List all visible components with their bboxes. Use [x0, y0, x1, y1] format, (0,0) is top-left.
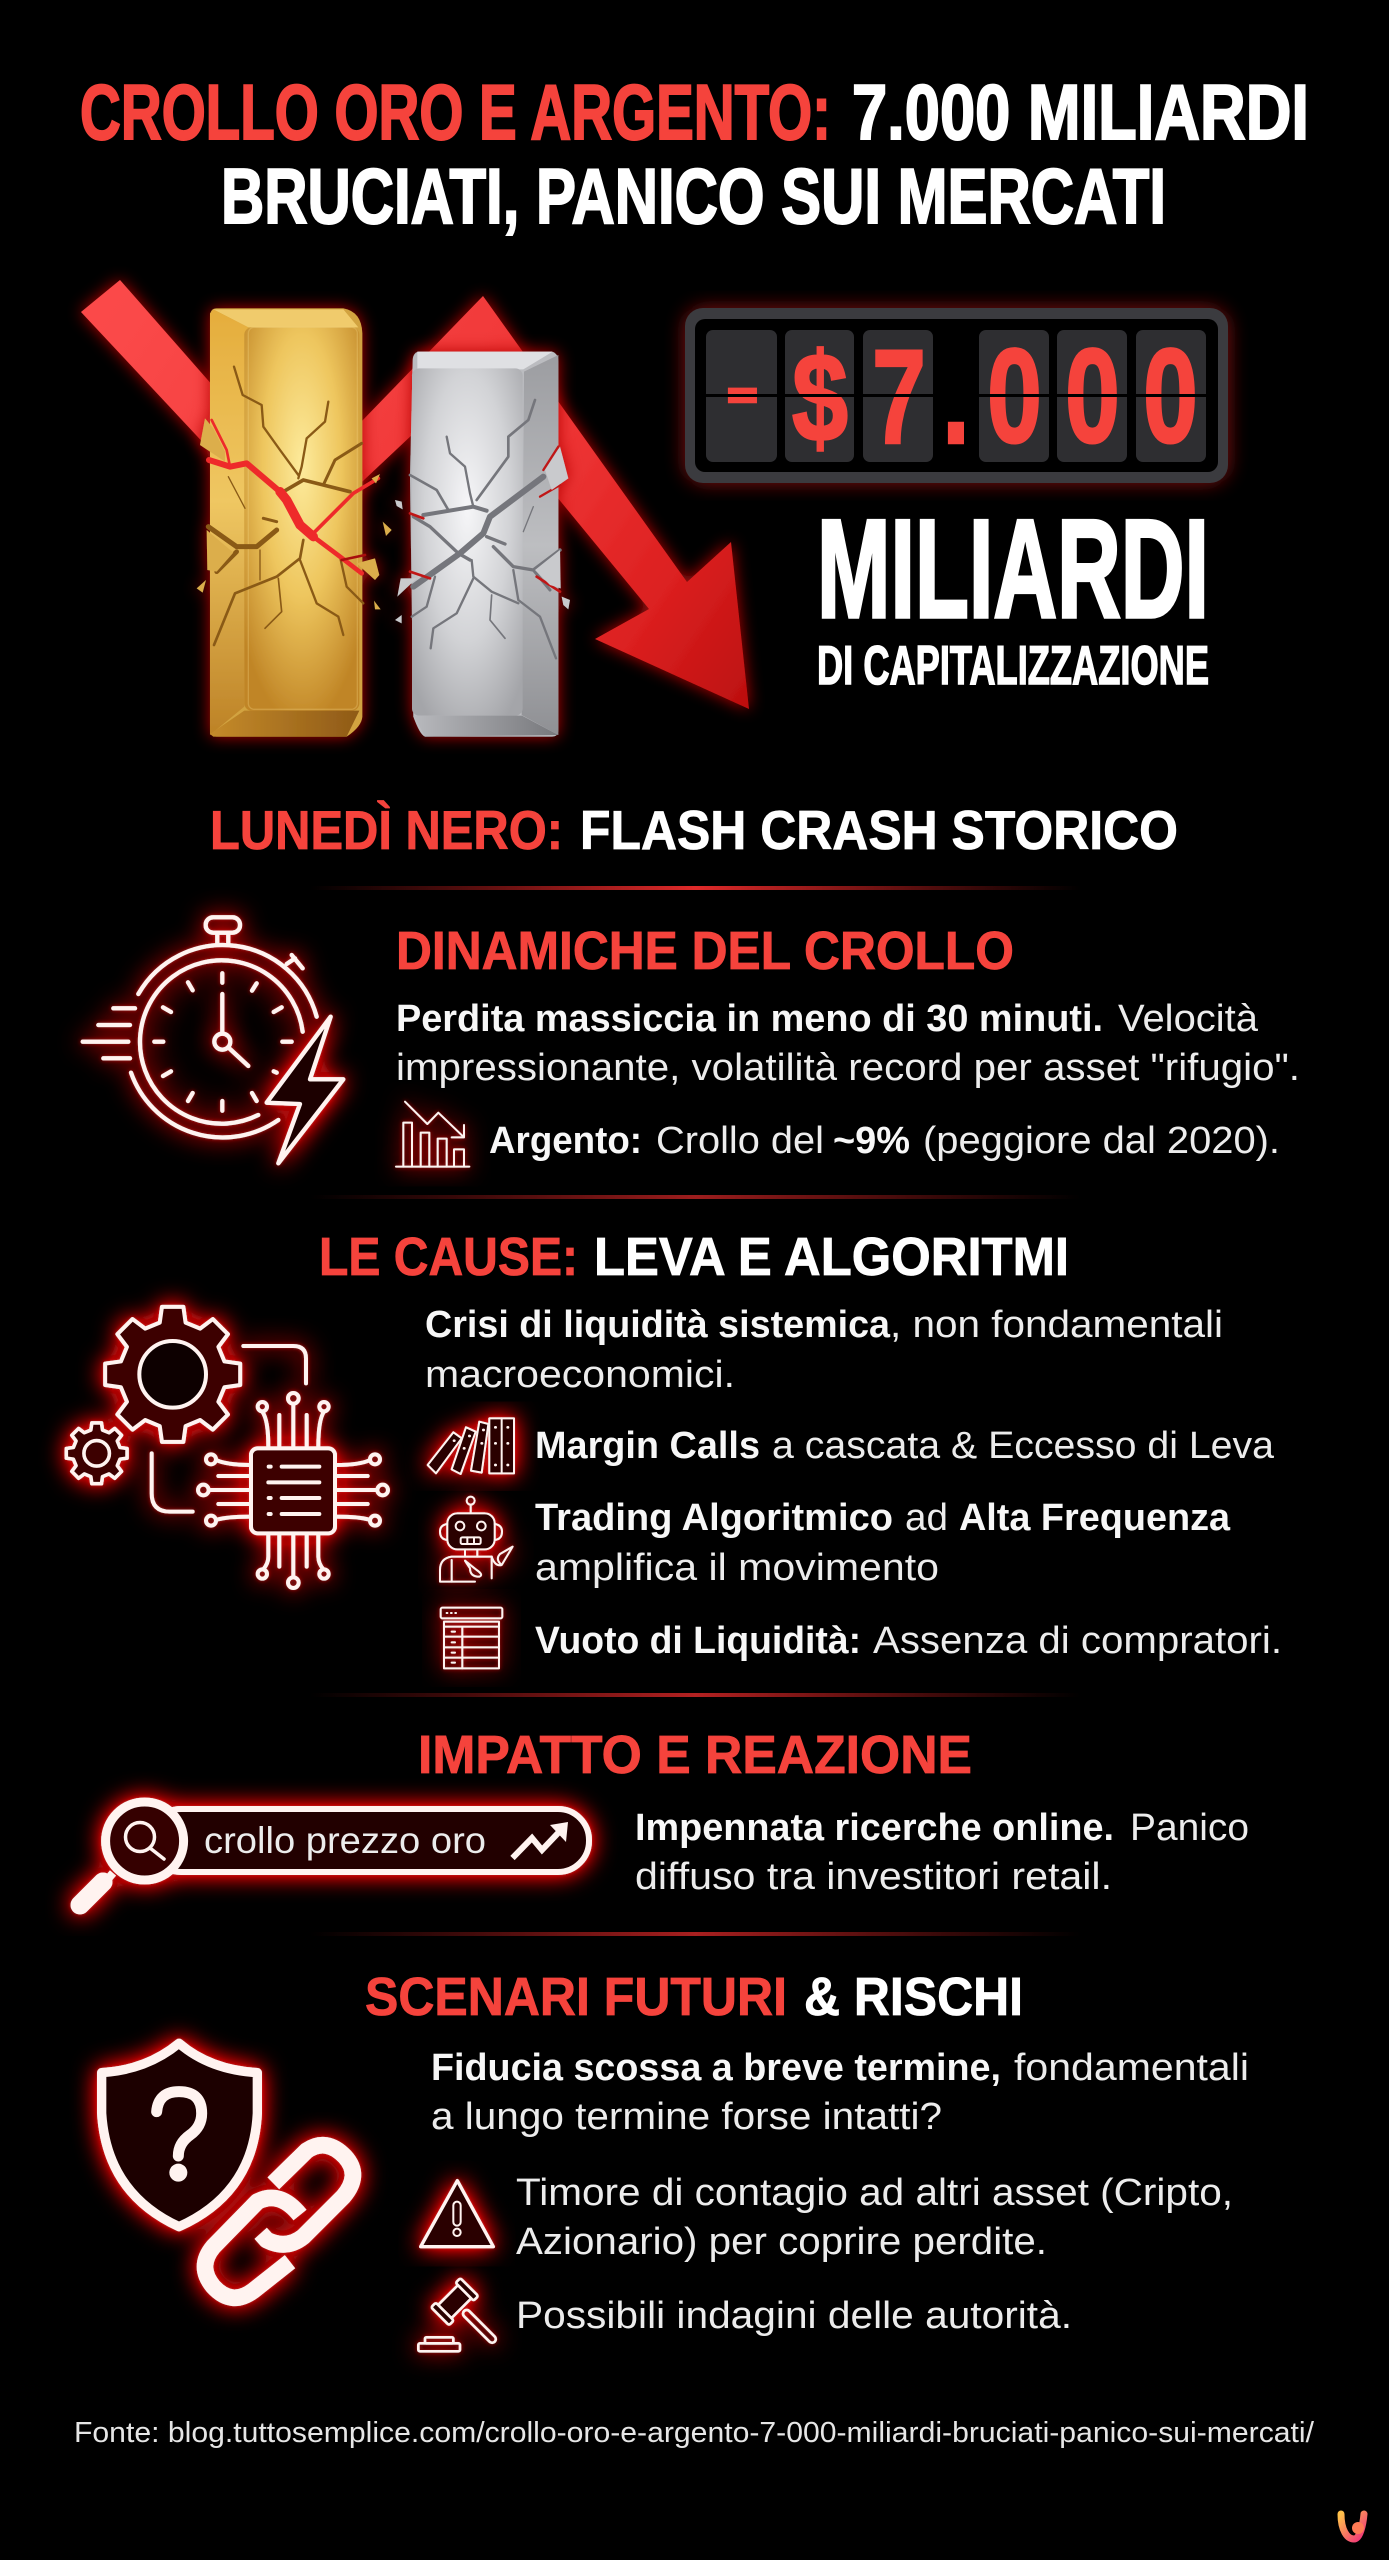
text: argento: (peggiore dal 2020). [923, 1120, 1280, 1162]
text: argento: Crollo del [656, 1120, 824, 1162]
icon: falling bar chart [396, 1102, 469, 1167]
heading: lunedi nero [210, 799, 1178, 861]
text: argento [489, 1120, 1280, 1162]
flip display: 7 [872, 323, 926, 472]
text: contagio: Timore di contagio ad altri asset (Cripto, [516, 2172, 1233, 2214]
heading: scenari: & RISCHI [804, 1967, 1023, 2027]
icon: search bar [80, 1802, 589, 1905]
heading: scenari: SCENARI FUTURI [365, 1967, 787, 2027]
text: dinamiche body: impressionante, volatilità record per asset "rifugio". [396, 1047, 1300, 1089]
text: trading: ad [905, 1497, 948, 1539]
icon: warning triangle [421, 2181, 493, 2247]
text: margin calls: Margin Calls [535, 1425, 760, 1467]
text: contagio: Azionario) per coprire perdite. [516, 2221, 1047, 2263]
silver cracks [410, 400, 560, 658]
heading: scenari [365, 1967, 1023, 2027]
icon: falling dominoes [428, 1418, 514, 1474]
heading: le cause: LEVA E ALGORITMI [594, 1227, 1069, 1287]
flip display: 0 [1065, 322, 1120, 471]
text: crisi: macroeconomici. [425, 1354, 735, 1396]
icon: table [441, 1608, 502, 1668]
text: dinamiche body: Velocità [1118, 998, 1259, 1040]
text: indagini: Possibili indagini delle autorità. [516, 2295, 1072, 2337]
text: trading: Trading Algoritmico [535, 1497, 893, 1539]
text: crisi: , non fondamentali [890, 1304, 1223, 1346]
gold bar [197, 308, 392, 737]
heading: le cause: LE CAUSE: [319, 1227, 578, 1287]
flip display: - [725, 325, 760, 448]
logo [1341, 2514, 1364, 2539]
gold cracks [208, 367, 363, 645]
gold fragments [197, 418, 392, 609]
text: trading [535, 1497, 1231, 1589]
text: argento: Argento: [489, 1120, 642, 1162]
text: crisi: Crisi di liquidità sistemica [425, 1304, 891, 1346]
text: vuoto: Vuoto di Liquidità: [535, 1620, 861, 1662]
heading: dinamiche: DINAMICHE DEL CROLLO [396, 921, 1014, 981]
text: argento: ~9% [833, 1120, 910, 1162]
gold red fracture [209, 420, 378, 573]
text: trading: Alta Frequenza [959, 1497, 1231, 1539]
source line: Fonte: blog.tuttosemplice.com/crollo-oro-e-argento-7-000-miliardi-bruciati-panico-sui-mercati/ [74, 2417, 1315, 2449]
silver red slivers [410, 447, 560, 592]
icon: stopwatch with lightning [83, 917, 343, 1163]
text: fiducia: a lungo termine forse intatti? [431, 2096, 942, 2138]
icon: shield and broken chain [102, 2043, 353, 2298]
flip display: $ [792, 327, 848, 468]
text: vuoto: Assenza di compratori. [873, 1620, 1282, 1662]
text: margin calls [535, 1425, 1275, 1467]
text: margin calls: a cascata & Eccesso di Leva [772, 1425, 1275, 1467]
text: impennata: Impennata ricerche online. [635, 1807, 1114, 1849]
text: crisi [425, 1304, 1223, 1396]
text: fiducia: fondamentali [1014, 2047, 1249, 2089]
text: impennata [635, 1807, 1249, 1898]
flip display: 0 [987, 322, 1042, 471]
flip display: 0 [1143, 322, 1198, 471]
heading: impatto: IMPATTO E REAZIONE [418, 1725, 972, 1785]
heading: lunedi nero: FLASH CRASH STORICO [580, 799, 1178, 861]
title: CROLLO ORO E ARGENTO: [80, 68, 831, 156]
falling red arrow [81, 280, 749, 709]
text: fiducia: Fiducia scossa a breve termine, [431, 2047, 1001, 2089]
text: trading: amplifica il movimento [535, 1547, 939, 1589]
heading: le cause [319, 1227, 1069, 1287]
title [80, 68, 1309, 240]
text: dinamiche body [396, 998, 1300, 1089]
text: dinamiche body: Perdita massiccia in meno di 30 minuti. [396, 998, 1103, 1040]
miliardi label [817, 490, 1209, 696]
silver fragments [395, 447, 570, 623]
heading: lunedi nero: LUNEDÌ NERO: [210, 799, 563, 861]
search query text: crollo prezzo oro [204, 1820, 486, 1861]
flip display [685, 308, 1228, 483]
text: contagio [516, 2172, 1233, 2263]
icon: gavel [418, 2278, 509, 2356]
text: vuoto [535, 1620, 1282, 1662]
flip display: . [942, 323, 970, 472]
text: fiducia [431, 2047, 1249, 2138]
text: impennata: diffuso tra investitori retail. [635, 1856, 1112, 1898]
icon: gears and chip [66, 1307, 388, 1588]
icon: robot [440, 1497, 513, 1582]
silver bar [395, 352, 570, 737]
text: impennata: Panico [1130, 1807, 1249, 1849]
